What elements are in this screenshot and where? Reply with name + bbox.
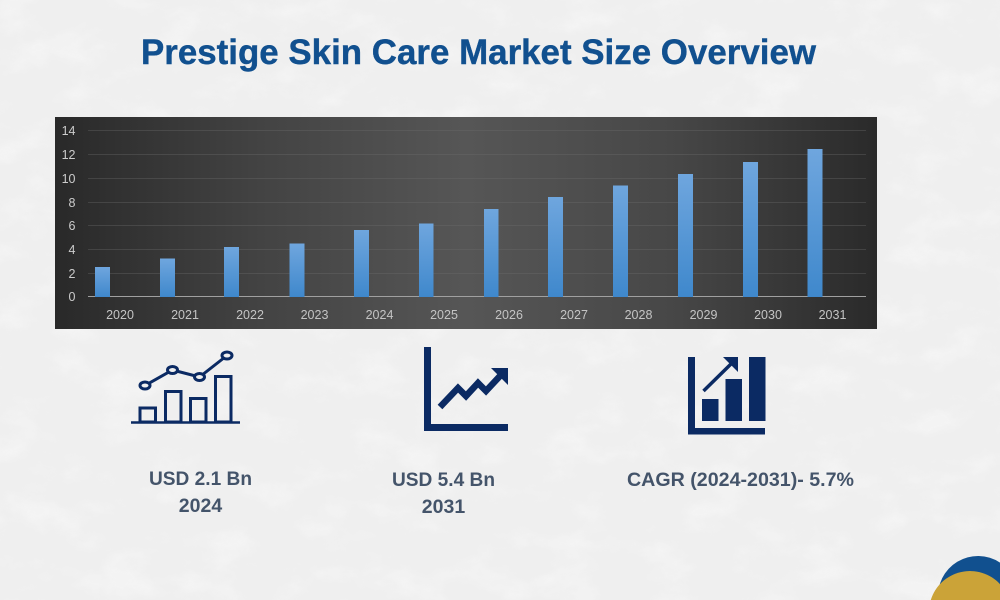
y axis labels: 6 [69,219,76,233]
y axis labels [62,124,76,304]
x axis labels: 2031 [819,308,846,322]
icon: bars with trend line [131,352,240,422]
x axis labels: 2023 [301,308,328,322]
stat: 2024 market size: USD 2.1 Bn [149,468,252,490]
y axis labels: 8 [69,196,76,210]
x axis labels: 2027 [560,308,588,322]
chart panel [55,117,877,329]
x axis labels: 2024 [366,308,393,322]
title: Prestige Skin Care Market Size Overview [141,33,817,72]
stat: CAGR: CAGR (2024-2031)- 5.7% [627,469,854,491]
stat: 2031 market size: 2031 [422,496,465,518]
x axis labels: 2025 [430,308,458,322]
stat: 2024 market size [149,468,252,517]
y axis labels: 14 [62,124,76,138]
y axis labels: 4 [69,243,76,257]
x axis labels: 2026 [495,308,523,322]
corner decoration [931,556,1000,600]
x axis labels: 2021 [171,308,199,322]
y axis labels: 10 [62,172,76,186]
x axis labels: 2022 [236,308,264,322]
y axis labels: 2 [69,267,76,281]
stat: 2024 market size: 2024 [179,495,222,517]
x axis labels: 2030 [754,308,782,322]
icon: axes with rising zigzag arrow [424,347,508,431]
x axis labels: 2028 [625,308,652,322]
stat: 2031 market size: USD 5.4 Bn [392,469,495,491]
bar chart [55,117,877,329]
x axis labels: 2029 [690,308,717,322]
x axis labels: 2020 [106,308,134,322]
bars [95,149,822,297]
stat: 2031 market size [392,469,495,518]
x axis labels [106,308,846,322]
y axis labels: 0 [69,290,76,304]
icon: solid bars with arrow [688,357,766,434]
y axis labels: 12 [62,148,76,162]
